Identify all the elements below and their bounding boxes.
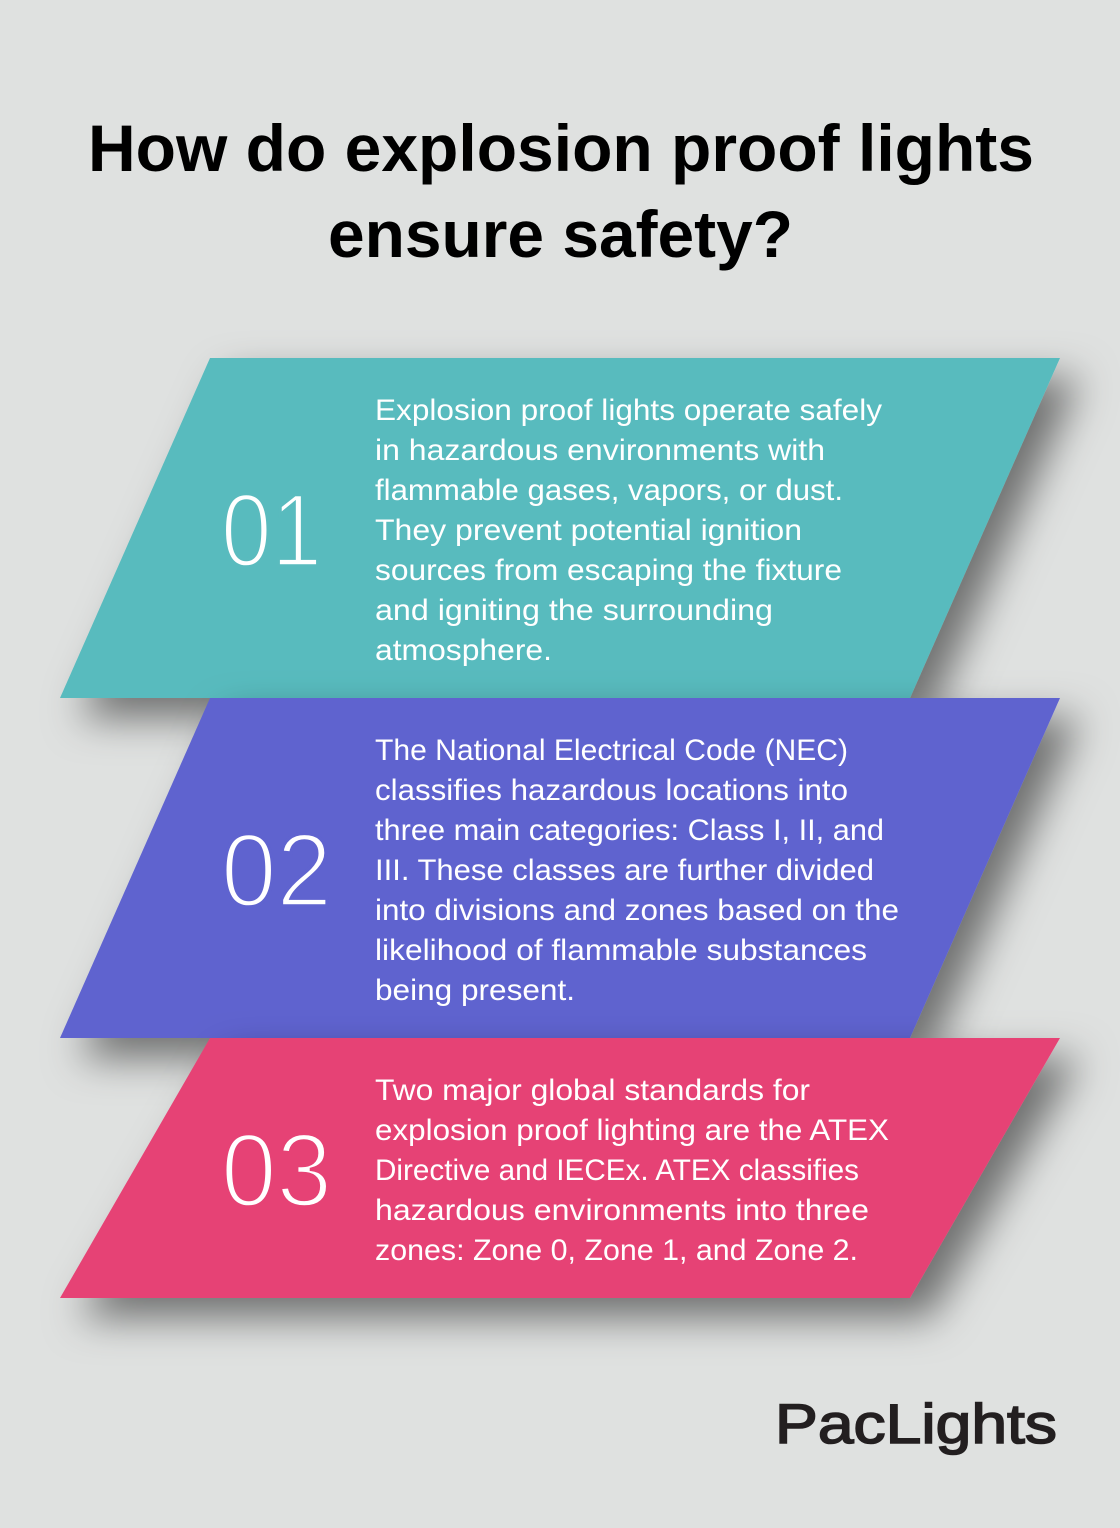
text block 01: sources from escaping the fixture	[375, 554, 842, 587]
text block 01: and igniting the surrounding	[375, 594, 773, 627]
text block 02: being present.	[375, 974, 575, 1007]
text block 01: in hazardous environments with	[375, 434, 825, 467]
text block 03	[375, 1074, 889, 1267]
text block 01: atmosphere.	[375, 634, 552, 667]
logo: PacLights: PacLights	[775, 1392, 1057, 1455]
panel 01 background	[60, 358, 1060, 698]
text block 03: hazardous environments into three	[375, 1194, 869, 1227]
text block 03: Directive and IECEx. ATEX classifies	[375, 1154, 859, 1187]
title: How do explosion proof lights	[88, 111, 1034, 185]
text block 02: likelihood of flammable substances	[375, 934, 867, 967]
text block 02: into divisions and zones based on the	[375, 894, 899, 927]
panel 02 background	[60, 698, 1060, 1038]
panel: step 01	[60, 358, 1060, 698]
number 03: 03	[221, 1113, 332, 1229]
panel: step 03	[60, 1038, 1060, 1298]
text block 01: flammable gases, vapors, or dust.	[375, 474, 843, 507]
text block 02: The National Electrical Code (NEC)	[375, 734, 848, 767]
number 02: 02	[221, 813, 332, 929]
panel: step 02	[60, 698, 1060, 1038]
text block 03: zones: Zone 0, Zone 1, and Zone 2.	[375, 1234, 858, 1267]
text block 03: Two major global standards for	[375, 1074, 810, 1107]
text block 03: explosion proof lighting are the ATEX	[375, 1114, 889, 1147]
text block 02: classifies hazardous locations into	[375, 774, 848, 807]
text block 01: They prevent potential ignition	[375, 514, 802, 547]
title	[88, 111, 1034, 271]
panel 03 background	[60, 1038, 1060, 1298]
text block 02: III. These classes are further divided	[375, 854, 874, 887]
text block 01	[375, 394, 882, 667]
number 01: 01	[221, 473, 322, 589]
text block 02: three main categories: Class I, II, and	[375, 814, 884, 847]
title: ensure safety?	[328, 197, 793, 271]
text block 01: Explosion proof lights operate safely	[375, 394, 882, 427]
text block 02	[375, 734, 899, 1007]
